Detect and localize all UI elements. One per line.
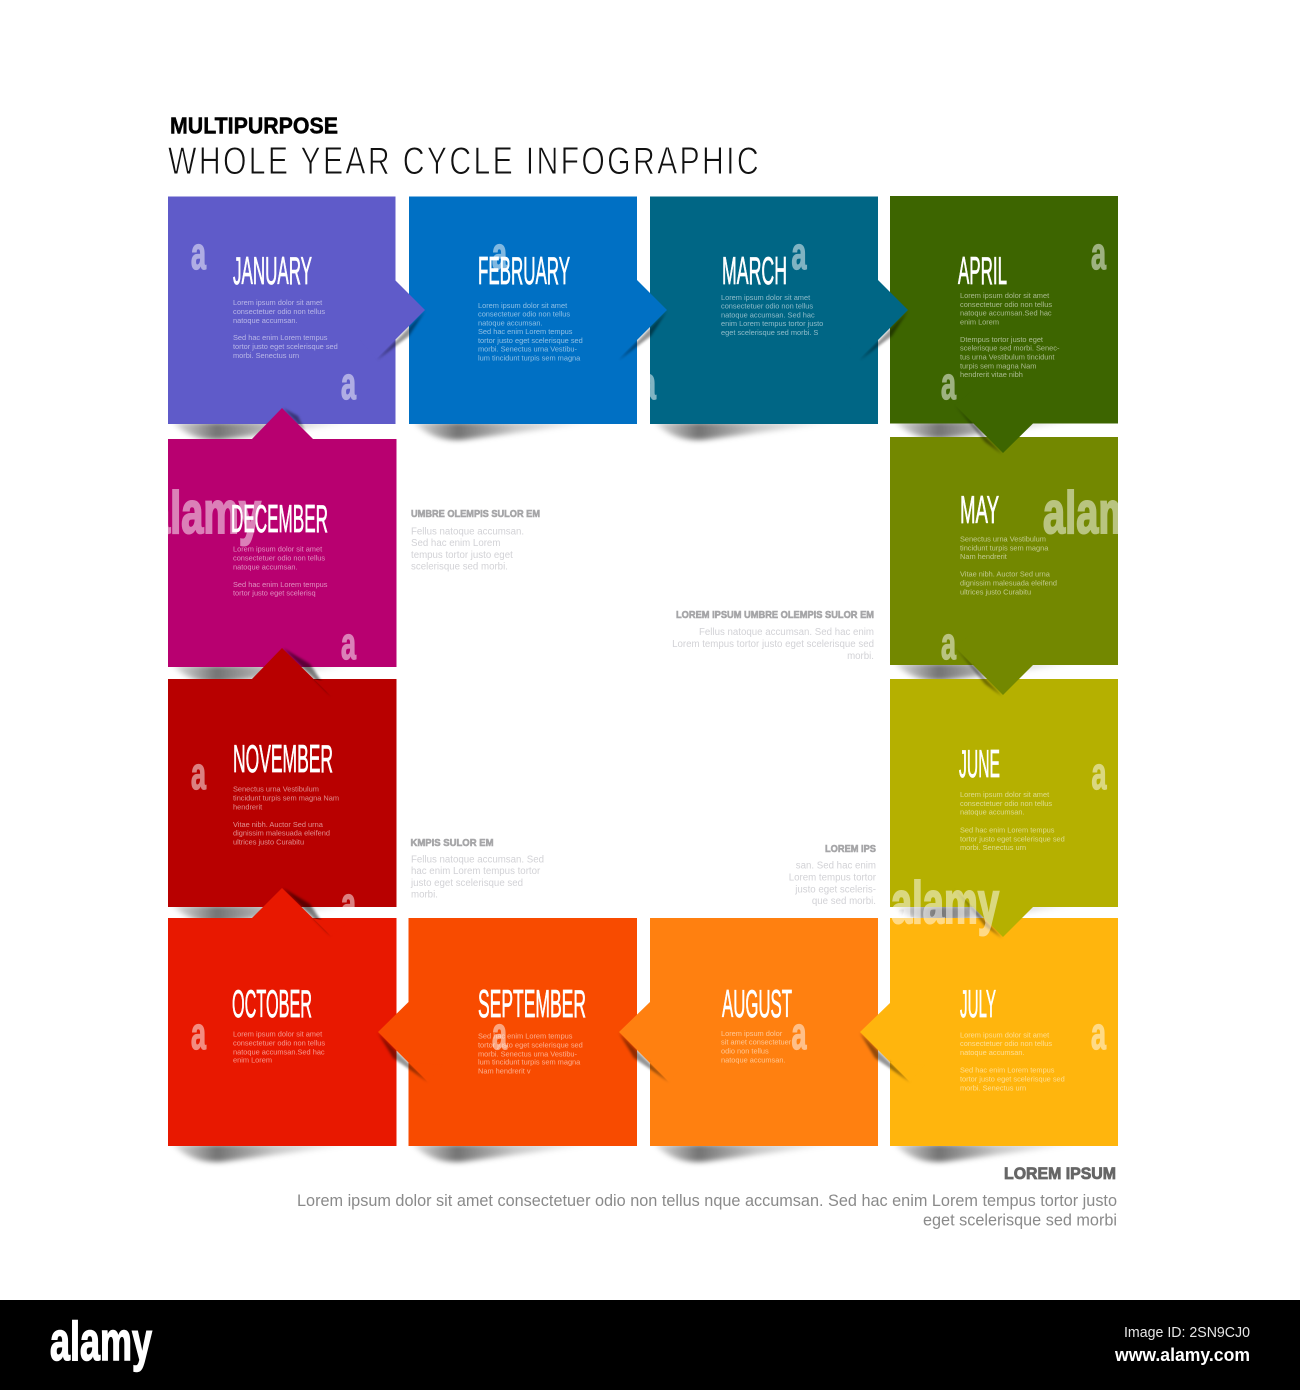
panel: November: ultrices justo Curabitu [233, 838, 304, 847]
text block: Umbre Olempis: Sed hac enim Lorem [411, 538, 500, 549]
arrow: December to January [252, 408, 313, 439]
panel: October: Lorem ipsum dolor sit amet [233, 1030, 322, 1039]
panel: November: Senectus urna Vestibulum [233, 785, 319, 794]
panel: February: lum tincidunt turpis sem magna [478, 354, 581, 362]
panel: December: DECEMBER [231, 498, 328, 541]
text block: footer note [297, 1165, 1117, 1230]
panel: March: natoque accumsan. Sed hac [721, 310, 815, 320]
panel: February: natoque accumsan. [478, 318, 543, 328]
panel: March: a [792, 228, 807, 279]
panel: January: Sed hac enim Lorem tempus [233, 333, 328, 342]
panel: May: Senectus urna Vestibulum [960, 535, 1046, 544]
panel: April: turpis sem magna Nam [960, 361, 1036, 370]
panel: March: a [641, 358, 657, 409]
title: WHOLE YEAR CYCLE INFOGRAPHIC [168, 140, 761, 183]
panel: April [890, 196, 1118, 424]
panel: May: dignissim malesuada eleifend [960, 578, 1057, 587]
arrow: September to October [378, 1002, 443, 1082]
panel: October: natoque accumsan.Sed hac [233, 1047, 325, 1056]
panel: January: JANUARY [233, 250, 312, 293]
panel: August: odio non tellus [721, 1047, 769, 1056]
panel: July: natoque accumsan. [960, 1048, 1025, 1057]
text block: Umbre Olempis: Fellus natoque accumsan. [411, 526, 524, 538]
panel: February: FEBRUARY [478, 250, 570, 293]
stock photo footer bar [0, 1300, 1300, 1390]
card drop shadows [172, 421, 1080, 1162]
panel: June: Lorem ipsum dolor sit amet [960, 790, 1049, 799]
panel: February: a [492, 228, 508, 279]
panel: April: natoque accumsan.Sed hac [960, 309, 1052, 318]
panel: December: natoque accumsan. [233, 563, 298, 572]
panel: December: alamy [148, 480, 261, 546]
panel: February: consectetuer odio non tellus [478, 310, 570, 319]
panel: July: a [1091, 1008, 1107, 1059]
panel: November: dignissim malesuada eleifend [233, 829, 330, 838]
text block: Kmpis Sulor: Fellus natoque accumsan. Sed [411, 854, 544, 866]
text block: footer note: LOREM IPSUM [1004, 1165, 1116, 1183]
panel: June: JUNE [959, 743, 1000, 786]
panel: February: morbi. Senectus urna Vestibu- [478, 345, 578, 354]
panel: July: Sed hac enim Lorem tempus [960, 1066, 1055, 1075]
panel: April: consectetuer odio non tellus [960, 300, 1052, 309]
panel: October: consectetuer odio non tellus [233, 1039, 325, 1048]
panel: July: morbi. Senectus urn [960, 1083, 1026, 1092]
panel: January: tortor justo eget scelerisque sed [233, 342, 338, 351]
arrow: August to September [619, 1002, 684, 1082]
panel: June: tortor justo eget scelerisque sed [960, 834, 1065, 843]
panel: April: a [1091, 228, 1107, 279]
panel: January: natoque accumsan. [233, 316, 298, 325]
text block: Lorem Ipsum Umbre Olempis [672, 609, 874, 662]
panel: July: Lorem ipsum dolor sit amet [960, 1030, 1049, 1039]
panel: January: morbi. Senectus urn [233, 351, 299, 360]
panel: November: Vitae nibh. Auctor Sed urna [233, 820, 324, 829]
panel: November: a [191, 748, 207, 799]
panel: July: consectetuer odio non tellus [960, 1039, 1052, 1048]
text block: Lorem Ipsum Umbre Olempis: Lorem tempus tortor justo eget scelerisque sed [672, 639, 874, 650]
text block: Lorem Ips: justo eget sceleris- [794, 884, 876, 896]
panel: December: consectetuer odio non tellus [233, 554, 325, 563]
text block: Lorem Ips: san. Sed hac enim [796, 860, 876, 872]
panel: September: SEPTEMBER [478, 983, 586, 1026]
title: MULTIPURPOSE [170, 112, 338, 138]
panel: April: enim Lorem [960, 317, 999, 326]
panel: August: sit amet consectetuer [721, 1038, 792, 1047]
text block: footer note: Lorem ipsum dolor sit amet consectetuer odio non tellus nque accumsan. Sed hac enim Lorem tempus tortor justo [297, 1192, 1117, 1210]
text block: Kmpis Sulor: justo eget scelerisque sed [410, 878, 523, 889]
text block: Kmpis Sulor: KMPIS SULOR EM [410, 837, 494, 849]
panel: November: a [341, 878, 357, 929]
panel: February [409, 196, 637, 424]
panel: March: MARCH [722, 250, 787, 293]
panel: March: Lorem ipsum dolor sit amet [721, 293, 810, 302]
stock photo footer bar: www.alamy.com [1114, 1345, 1250, 1365]
text block: Umbre Olempis [411, 508, 540, 572]
panel: May: MAY [960, 489, 999, 532]
panel: January [168, 196, 396, 424]
text block: Lorem Ips: Lorem tempus tortor [789, 872, 877, 884]
panel: September: tortor justo eget scelerisque sed [478, 1041, 583, 1050]
arrow: April to May [955, 390, 1033, 454]
text block: Lorem Ips: que sed morbi. [812, 896, 876, 907]
panel: August: natoque accumsan. [721, 1055, 786, 1064]
panel: October: enim Lorem [233, 1056, 272, 1065]
arrow: November to December [252, 648, 345, 696]
panel: March: eget scelerisque sed morbi. S [721, 328, 818, 337]
panel: May [890, 437, 1118, 669]
panel: April: scelerisque sed morbi. Senec- [960, 344, 1060, 353]
panel: September: a [492, 1008, 508, 1059]
panel: April: tus urna Vestibulum tincidunt [960, 352, 1054, 362]
stock photo footer bar: alamy [50, 1310, 152, 1372]
watermark: alamy on May: alamy [1043, 480, 1156, 546]
text block: Kmpis Sulor: hac enim Lorem tempus tortor [411, 866, 541, 877]
text block: Kmpis Sulor [410, 837, 544, 900]
panel: October [168, 918, 396, 1146]
panel: June: Sed hac enim Lorem tempus [960, 825, 1055, 834]
title [168, 112, 761, 183]
panel: August: AUGUST [722, 983, 792, 1026]
panel: June [890, 679, 1118, 907]
panel: January: Lorem ipsum dolor sit amet [233, 298, 322, 307]
panel: January: a [191, 228, 207, 279]
panel: November: tincidunt turpis sem magna Nam [233, 794, 339, 803]
arrow: June to July [955, 874, 1033, 938]
arrow: July to August [860, 1003, 925, 1082]
panel: April: Dtempus tortor justo eget [960, 335, 1043, 344]
panel: November: NOVEMBER [233, 738, 333, 781]
panel: March [641, 196, 878, 424]
panel: December: Sed hac enim Lorem tempus [233, 580, 328, 589]
panel: April: a [941, 358, 957, 409]
panel: April: APRIL [958, 250, 1007, 293]
panel: February: tortor justo eget scelerisque sed [478, 336, 583, 345]
panel: May: ultrices justo Curabitu [960, 587, 1031, 596]
watermark: alamy on June: alamy [891, 870, 999, 936]
panel: June: morbi. Senectus urn [960, 843, 1026, 852]
panel: August: a [792, 1008, 807, 1059]
panel: October: a [191, 1008, 207, 1059]
arrow: January to February [360, 280, 425, 360]
panel: April: hendrerit vitae nibh [960, 370, 1023, 379]
text block: Kmpis Sulor: morbi. [411, 890, 438, 900]
panel: November: hendrerit [233, 803, 262, 812]
panel: March: consectetuer odio non tellus [721, 302, 813, 311]
panel: July [890, 918, 1118, 1146]
panel: September: Sed hac enim Lorem tempus [478, 1032, 573, 1041]
panel: June: consectetuer odio non tellus [960, 799, 1052, 808]
text block: footer note: eget scelerisque sed morbi [923, 1212, 1117, 1230]
text block: Lorem Ips [789, 843, 877, 907]
panel: May: Vitae nibh. Auctor Sed urna [960, 570, 1051, 578]
text block: Lorem Ipsum Umbre Olempis: LOREM IPSUM UMBRE OLEMPIS SULOR EM [676, 609, 874, 621]
panel: November [168, 679, 396, 929]
panel: January: consectetuer odio non tellus [233, 307, 325, 316]
panel: January: a [341, 358, 357, 409]
panel: September: morbi. Senectus urna Vestibu- [478, 1049, 578, 1058]
text block: Umbre Olempis: tempus tortor justo eget [411, 550, 513, 561]
panel: December: tortor justo eget scelerisq [233, 589, 316, 598]
panel: August [650, 918, 878, 1146]
panel: December: Lorem ipsum dolor sit amet [233, 545, 322, 554]
panel: September: lum tincidunt turpis sem magna [478, 1058, 581, 1067]
arrow: March to April [843, 280, 908, 360]
panel: September: Nam hendrerit v [478, 1067, 531, 1076]
panel: March: enim Lorem tempus tortor justo [721, 319, 823, 328]
text block: Umbre Olempis: scelerisque sed morbi. [411, 562, 508, 572]
panel: September [408, 918, 637, 1146]
panel: July: tortor justo eget scelerisque sed [960, 1075, 1065, 1084]
panel: July: JULY [960, 983, 996, 1026]
panel: December: a [341, 618, 357, 669]
panel: April: Lorem ipsum dolor sit amet [960, 291, 1049, 300]
panel: May: a [941, 618, 957, 669]
text block: Umbre Olempis: UMBRE OLEMPIS SULOR EM [411, 508, 540, 520]
arrow: May to June [955, 632, 1033, 696]
panel: December [148, 439, 396, 669]
stock photo footer bar: Image ID: 2SN9CJ0 [1124, 1324, 1250, 1341]
text block: Lorem Ipsum Umbre Olempis: Fellus natoque accumsan. Sed hac enim [699, 627, 874, 638]
text block: Lorem Ipsum Umbre Olempis: morbi. [847, 651, 874, 662]
arrow: February to March [602, 280, 667, 360]
text block: Lorem Ips: LOREM IPS [825, 843, 876, 855]
panel: February: Sed hac enim Lorem tempus [478, 327, 573, 336]
arrow: October to November [252, 888, 345, 936]
panel: October: OCTOBER [232, 983, 312, 1026]
panel: May: Nam hendrerit [960, 552, 1007, 561]
panel: June: a [1092, 748, 1107, 799]
panel: June: natoque accumsan. [960, 808, 1025, 817]
panel: May: tincidunt turpis sem magna [960, 544, 1049, 552]
panel: August: Lorem ipsum dolor [721, 1029, 783, 1038]
panel: February: Lorem ipsum dolor sit amet [478, 301, 567, 310]
